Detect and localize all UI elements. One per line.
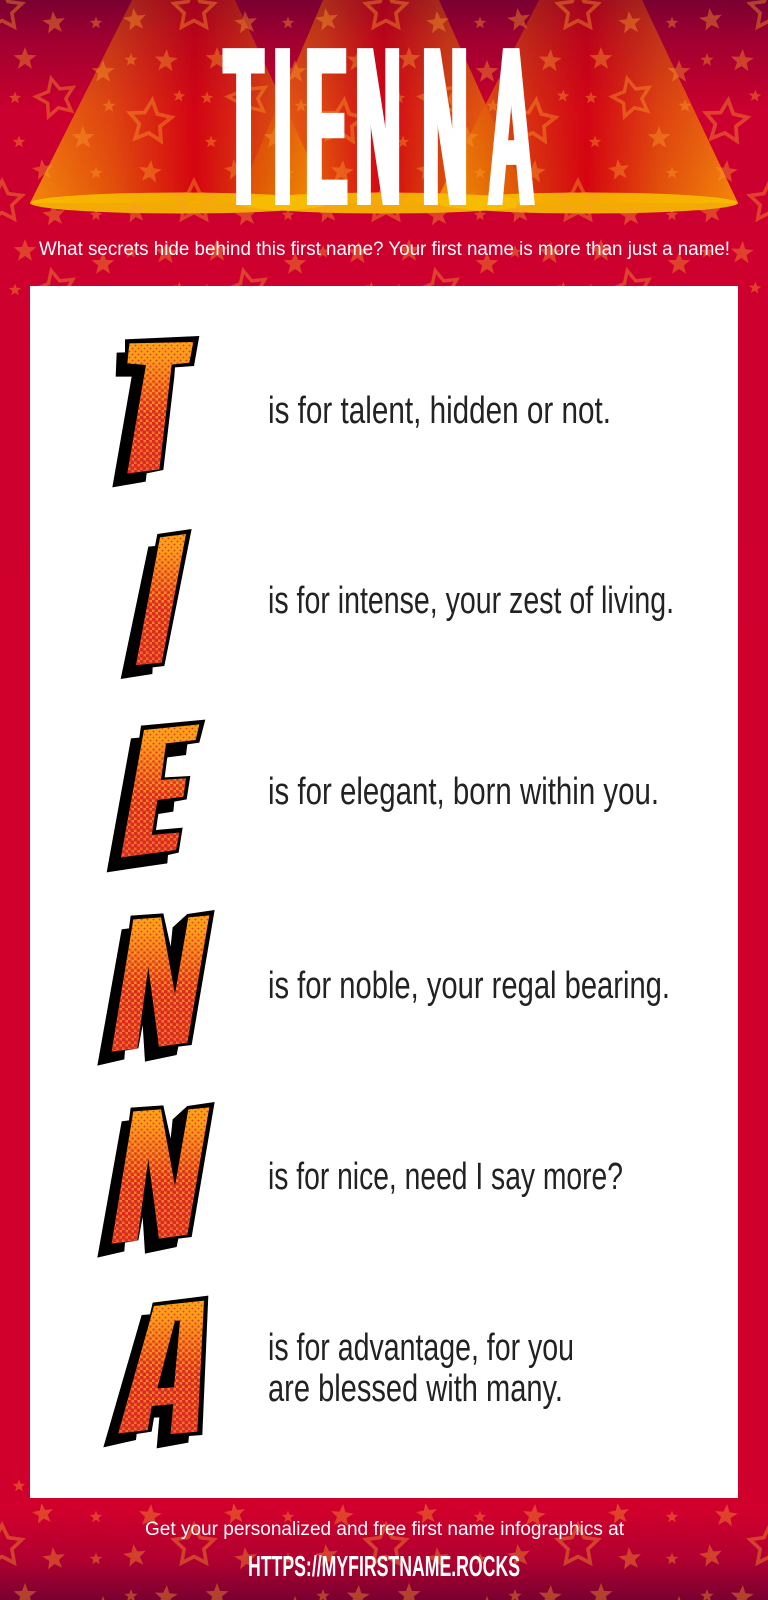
letter I (121, 529, 192, 679)
panel: white card (30, 286, 738, 1498)
subtitle: What secrets hide behind this first name? Your first name is more than just a name! (39, 239, 730, 260)
spotlights (30, 0, 738, 214)
text: A lines: is for advantage, for you (268, 1327, 574, 1369)
text: N line 2: is for nice, need I say more? (268, 1156, 623, 1198)
title: TIENNA (225, 0, 533, 254)
footer url: HTTPS://MYFIRSTNAME.ROCKS (248, 1551, 520, 1583)
text: A lines: are blessed with many. (268, 1368, 563, 1410)
letter A (103, 1296, 208, 1448)
text: T line: is for talent, hidden or not. (268, 390, 611, 432)
letter T (112, 336, 199, 487)
footer text: Get your personalized and free first name infographics at (145, 1519, 625, 1540)
letter E (107, 720, 205, 872)
text: E line: is for elegant, born within you. (268, 771, 659, 813)
star pattern: bottom (0, 1476, 768, 1600)
letter N (97, 1102, 215, 1258)
star pattern: top (0, 0, 768, 300)
letter N (97, 910, 215, 1066)
text: A lines (268, 1327, 574, 1410)
